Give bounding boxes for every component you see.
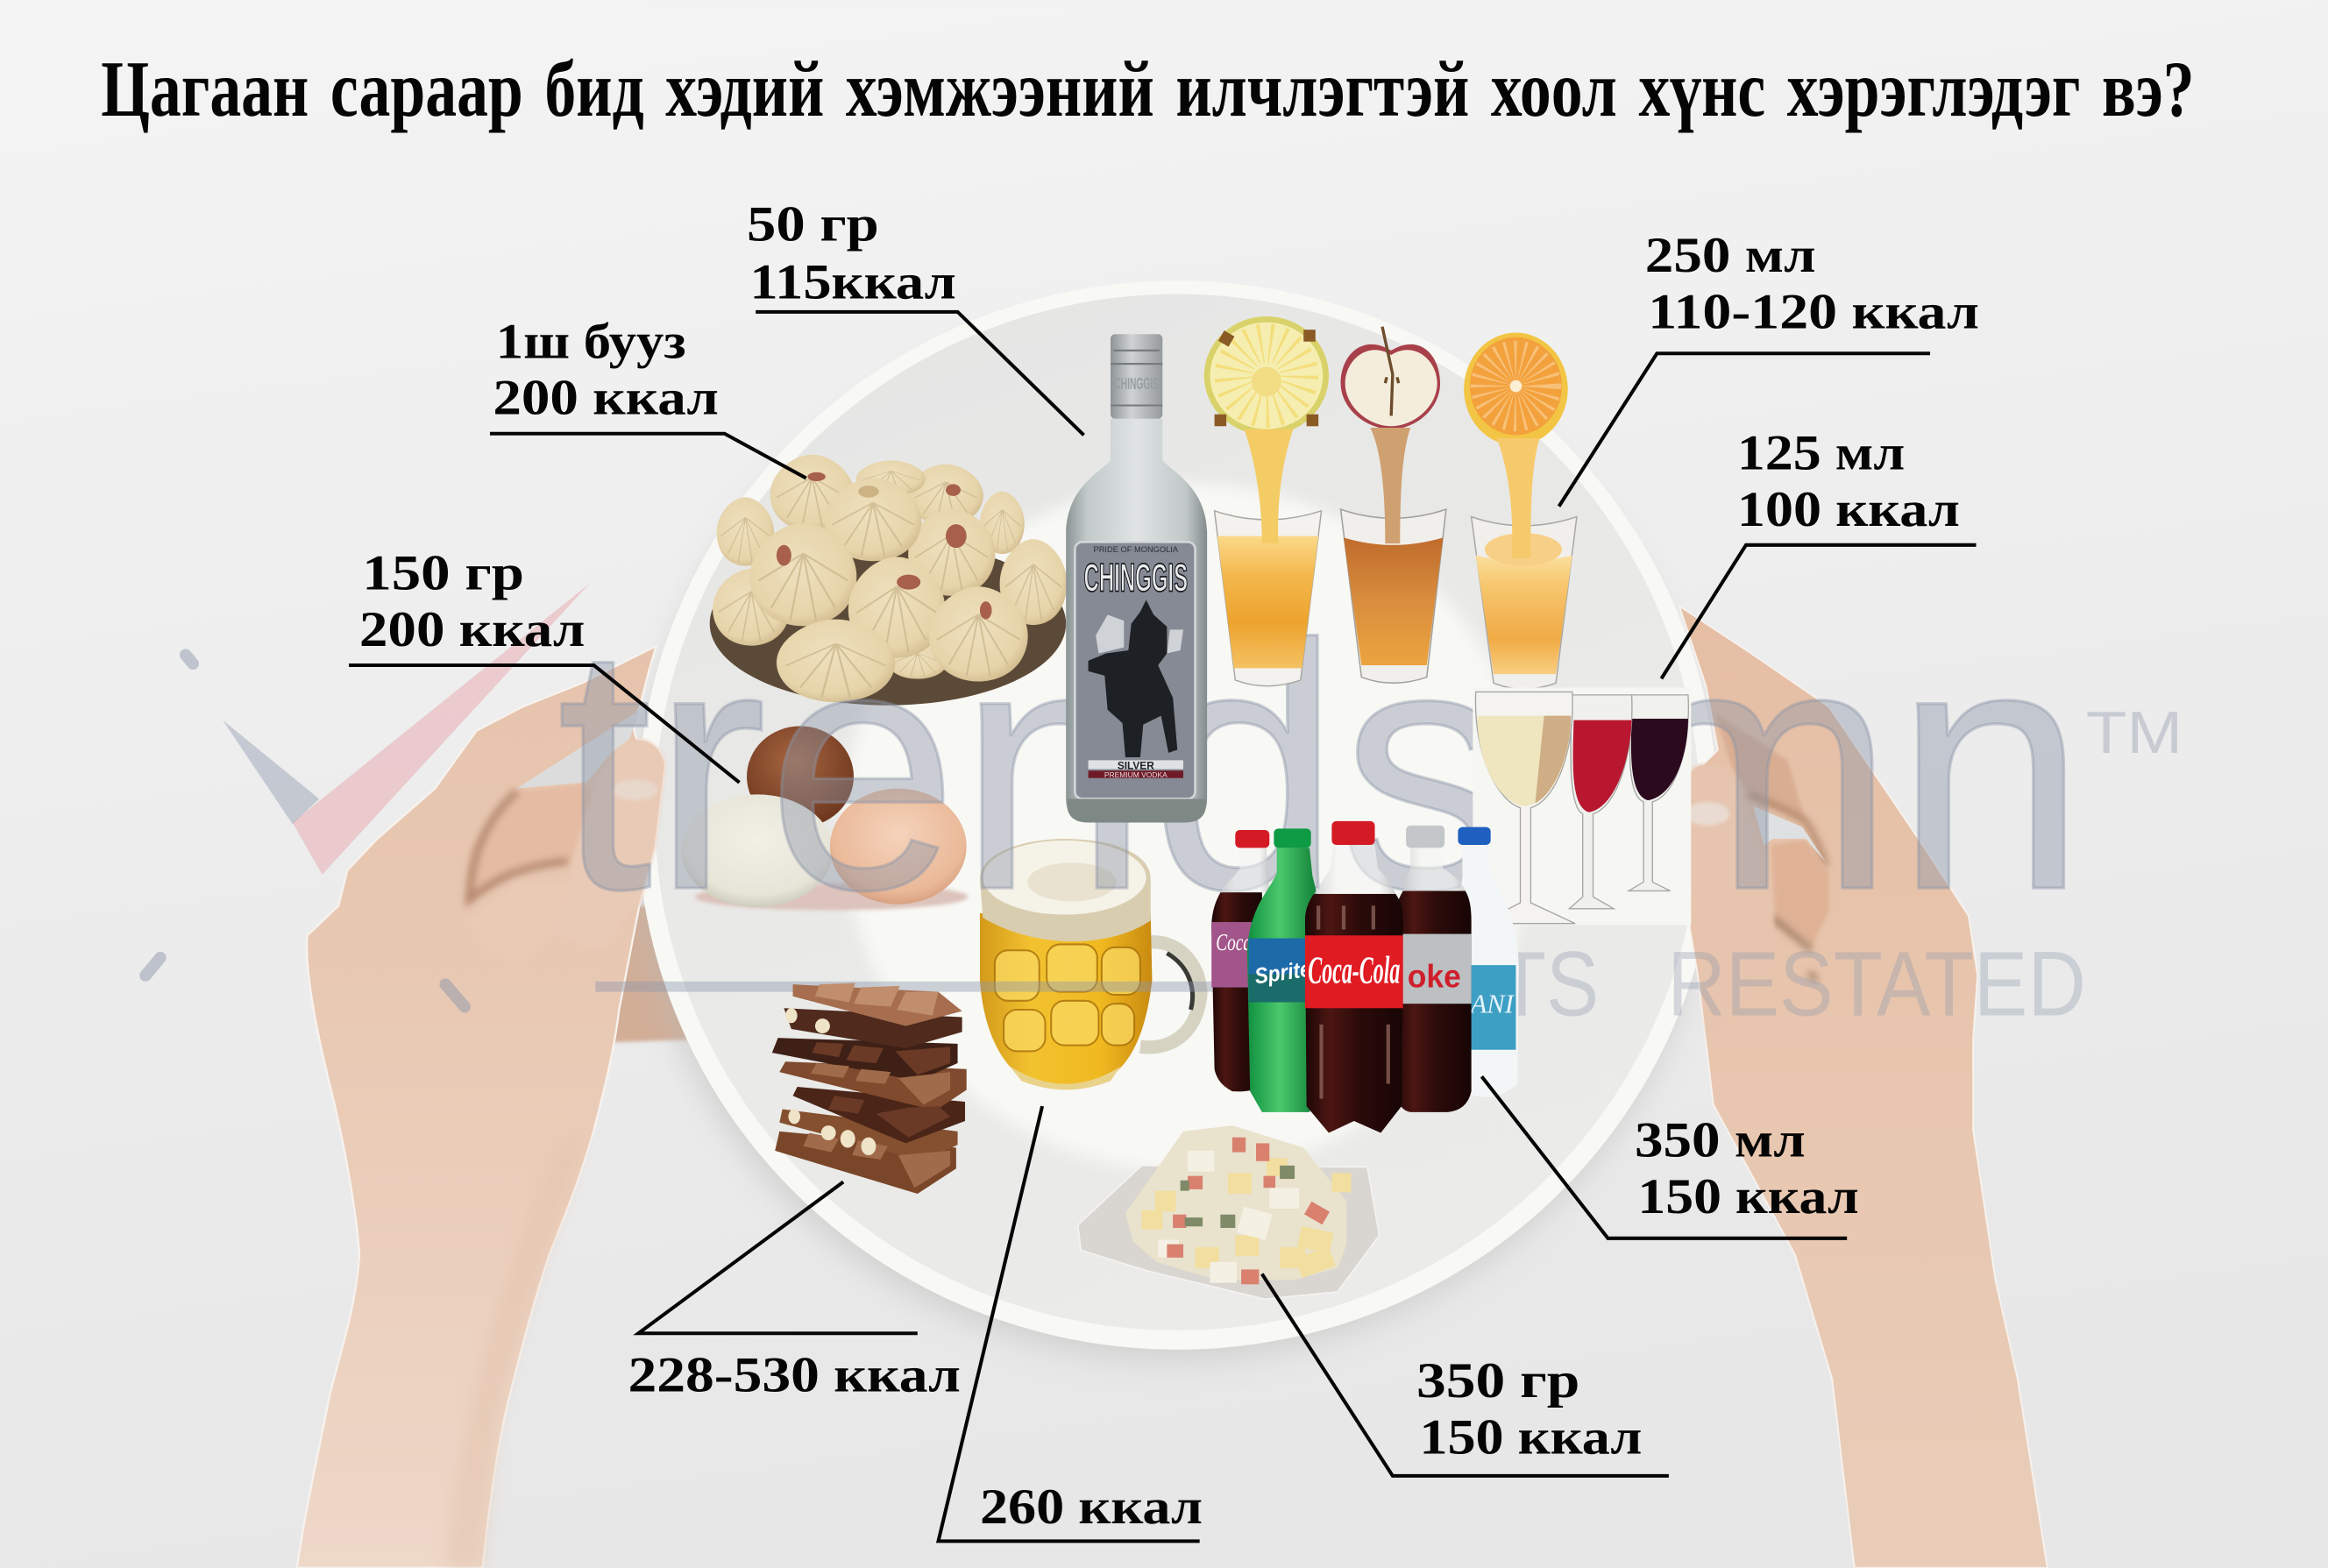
salad dish — [1078, 1166, 1380, 1299]
callout: juice — [1559, 228, 1979, 507]
chocolate bar 7 — [775, 1132, 956, 1194]
callout: salad: 150 ккал — [1419, 1409, 1642, 1465]
callout: salad — [1262, 1274, 1669, 1476]
chocolate bar 4 — [779, 1061, 967, 1110]
apple juice stream — [1370, 428, 1410, 543]
beer dimples — [995, 944, 1140, 1051]
apple juice in glass — [1344, 537, 1443, 665]
pineapple rays — [1234, 343, 1299, 408]
right hand dark crease — [1772, 918, 1817, 980]
pineapple juice in glass — [1217, 536, 1318, 668]
callout: vodka: 115ккал — [749, 255, 956, 310]
callout: vodka — [747, 197, 1084, 435]
salad mound — [1125, 1125, 1346, 1280]
beer mug handle — [1140, 942, 1201, 1047]
food: beer mug — [980, 839, 1201, 1089]
white egg — [681, 794, 833, 907]
wine cut-out background — [1473, 687, 1691, 925]
apple juice glass — [1341, 509, 1446, 683]
callout: buuz — [490, 314, 806, 479]
pineapple juice glass — [1215, 511, 1322, 686]
small coca-cola bottle — [1211, 830, 1269, 1091]
orange half — [1464, 333, 1568, 445]
chocolate bar 2 — [784, 1008, 962, 1048]
sprite bottle: Sprite — [1253, 957, 1312, 989]
callout: chocolate: 228-530 ккал — [628, 1347, 961, 1402]
brown egg — [747, 726, 854, 827]
salad pickle pieces — [1181, 1166, 1295, 1228]
buuz serving dish — [710, 542, 1066, 706]
chocolate nuts — [785, 1008, 876, 1155]
plate inner surface — [655, 294, 1700, 1330]
beer liquid — [980, 913, 1152, 1088]
food: apple juice — [1341, 327, 1446, 683]
watermark rule — [595, 982, 1234, 992]
food: vodka bottle — [1066, 334, 1207, 823]
vodka pride line: PRIDE OF MONGOLIA — [1094, 545, 1179, 554]
left thumb nail — [614, 779, 657, 800]
watermark dots — [146, 655, 465, 1007]
watermark: trends.mn logo — [146, 573, 2182, 1036]
right hand thumb — [1678, 764, 1776, 1039]
left hand finger crease — [469, 791, 567, 900]
eggs shadow — [695, 883, 968, 910]
plate bright floor — [843, 483, 1532, 1172]
vodka cap name: CHINGGIS — [1114, 374, 1159, 393]
buuz meat openings — [777, 472, 992, 619]
pineapple core — [1252, 367, 1281, 396]
white wine glass — [1475, 692, 1575, 924]
food: orange juice — [1464, 333, 1577, 689]
vodka map patches — [1096, 614, 1183, 653]
orange juice glass — [1472, 517, 1577, 689]
apple flesh — [1345, 350, 1437, 426]
left hand thumb — [552, 740, 665, 950]
chocolate bar 1 — [793, 984, 962, 1026]
food: pineapple juice — [1204, 316, 1329, 686]
watermark check mark red stroke — [293, 584, 589, 875]
callout: eggs — [349, 546, 740, 783]
dark red wine glass — [1629, 695, 1688, 890]
vodka cap — [1111, 334, 1162, 419]
apple stem and seeds — [1382, 327, 1399, 415]
small coca-cola bottle: Coca — [1216, 929, 1252, 955]
salad white pieces — [1158, 1151, 1299, 1283]
callout: eggs: 150 гр — [362, 546, 524, 601]
chocolate top squares — [815, 983, 939, 1016]
orange segments — [1491, 361, 1541, 411]
large coca-cola bottle — [1305, 821, 1403, 1133]
callout: wine: 125 мл — [1737, 425, 1905, 480]
vodka premium band — [1089, 770, 1183, 778]
water bottle: ANI — [1469, 989, 1515, 1018]
watermark wordmark: trends.mn — [557, 573, 2086, 962]
vodka glass body — [1066, 419, 1207, 823]
vodka premium text: PREMIUM VODKA — [1104, 770, 1168, 779]
callout: soft drinks: 150 ккал — [1637, 1169, 1859, 1224]
right hand gap — [1753, 806, 1826, 862]
plate — [635, 280, 1718, 1360]
callout: salad: 350 гр — [1416, 1353, 1579, 1408]
right thumb nail — [1686, 802, 1729, 826]
chocolate dark highlights — [813, 1042, 950, 1138]
beer foam side — [980, 839, 1151, 941]
vodka rider and horse — [1089, 600, 1177, 757]
watermark check mark gray stroke — [223, 720, 319, 824]
beer handle core — [1167, 954, 1193, 1010]
large coca-cola bottle: Coca-Cola — [1308, 948, 1400, 991]
chocolate milk highlights — [803, 1063, 950, 1188]
food: wine glasses — [1473, 687, 1691, 925]
chocolate bar 5 — [793, 1087, 965, 1143]
vodka silver band — [1089, 760, 1183, 770]
watermark tagline: restated: RESTATED — [1667, 933, 2086, 1036]
plate shadow — [635, 309, 1710, 1360]
callout: buuz: 200 ккал — [493, 371, 719, 426]
plate rim — [637, 280, 1718, 1350]
watermark trademark: TM — [2086, 700, 2182, 766]
left hand gap between index finger and thumb — [516, 710, 640, 789]
beige egg — [830, 789, 967, 905]
food: buuz dumplings — [710, 455, 1067, 706]
callout: soft drinks — [1481, 1076, 1859, 1238]
food: eggs — [681, 726, 968, 910]
left hand middle finger — [465, 784, 593, 905]
beer foam top — [983, 841, 1146, 915]
salad red pieces — [1167, 1138, 1330, 1284]
callout: juice: 110-120 ккал — [1648, 284, 1979, 339]
left hand — [297, 646, 665, 1568]
left hand: fingers behind plate — [612, 905, 698, 1042]
vodka brand name: CHINGGIS — [1084, 555, 1188, 600]
orange center — [1510, 380, 1522, 392]
left hand curled finger — [469, 882, 569, 963]
food: chocolate stack — [772, 983, 967, 1194]
vodka main label — [1075, 542, 1196, 798]
left wrist shading — [445, 1128, 586, 1568]
callout: vodka: 50 гр — [747, 197, 879, 252]
beer foam texture — [1027, 862, 1117, 901]
diet coke bottle — [1395, 826, 1472, 1112]
sprite bottle — [1247, 828, 1320, 1112]
salad potato pieces — [1142, 1158, 1351, 1278]
red wine glass — [1569, 695, 1632, 909]
vodka base — [1068, 798, 1205, 823]
beer mug base — [1010, 1066, 1121, 1089]
vodka cap band — [1111, 351, 1162, 406]
chocolate bar 6 — [779, 1109, 958, 1161]
callout: beer: 260 ккал — [980, 1479, 1203, 1535]
vodka silver text: SILVER — [1118, 760, 1154, 772]
chocolate bar 3 — [772, 1038, 958, 1081]
right hand curled finger — [1771, 841, 1829, 947]
callout: buuz: 1ш бууз — [496, 314, 686, 369]
callout: beer — [939, 1106, 1203, 1541]
callout: soft drinks: 350 мл — [1635, 1113, 1806, 1168]
food: olivier salad on dish — [1078, 1125, 1380, 1299]
watermark tagline: facts: FACTS — [1344, 933, 1599, 1036]
orange juice foam — [1485, 533, 1562, 566]
apple half — [1341, 344, 1440, 429]
callout: wine: 100 ккал — [1737, 482, 1960, 537]
water bottle — [1451, 827, 1519, 1097]
right hand — [1678, 606, 2048, 1568]
callout: wine — [1661, 425, 1977, 678]
orange juice in glass — [1476, 556, 1572, 674]
pineapple eyes — [1215, 330, 1318, 426]
food: soft drink bottles — [1211, 821, 1519, 1133]
diet coke bottle: oke — [1408, 958, 1461, 995]
right hand under finger — [1714, 713, 1806, 821]
pineapple slice — [1204, 316, 1329, 435]
callout: chocolate — [628, 1181, 961, 1402]
right hand finger crease — [1748, 794, 1826, 866]
callout: juice: 250 мл — [1645, 228, 1816, 283]
pineapple juice stream — [1244, 429, 1293, 543]
callout: eggs: 200 ккал — [359, 602, 585, 657]
orange juice stream — [1496, 438, 1540, 558]
